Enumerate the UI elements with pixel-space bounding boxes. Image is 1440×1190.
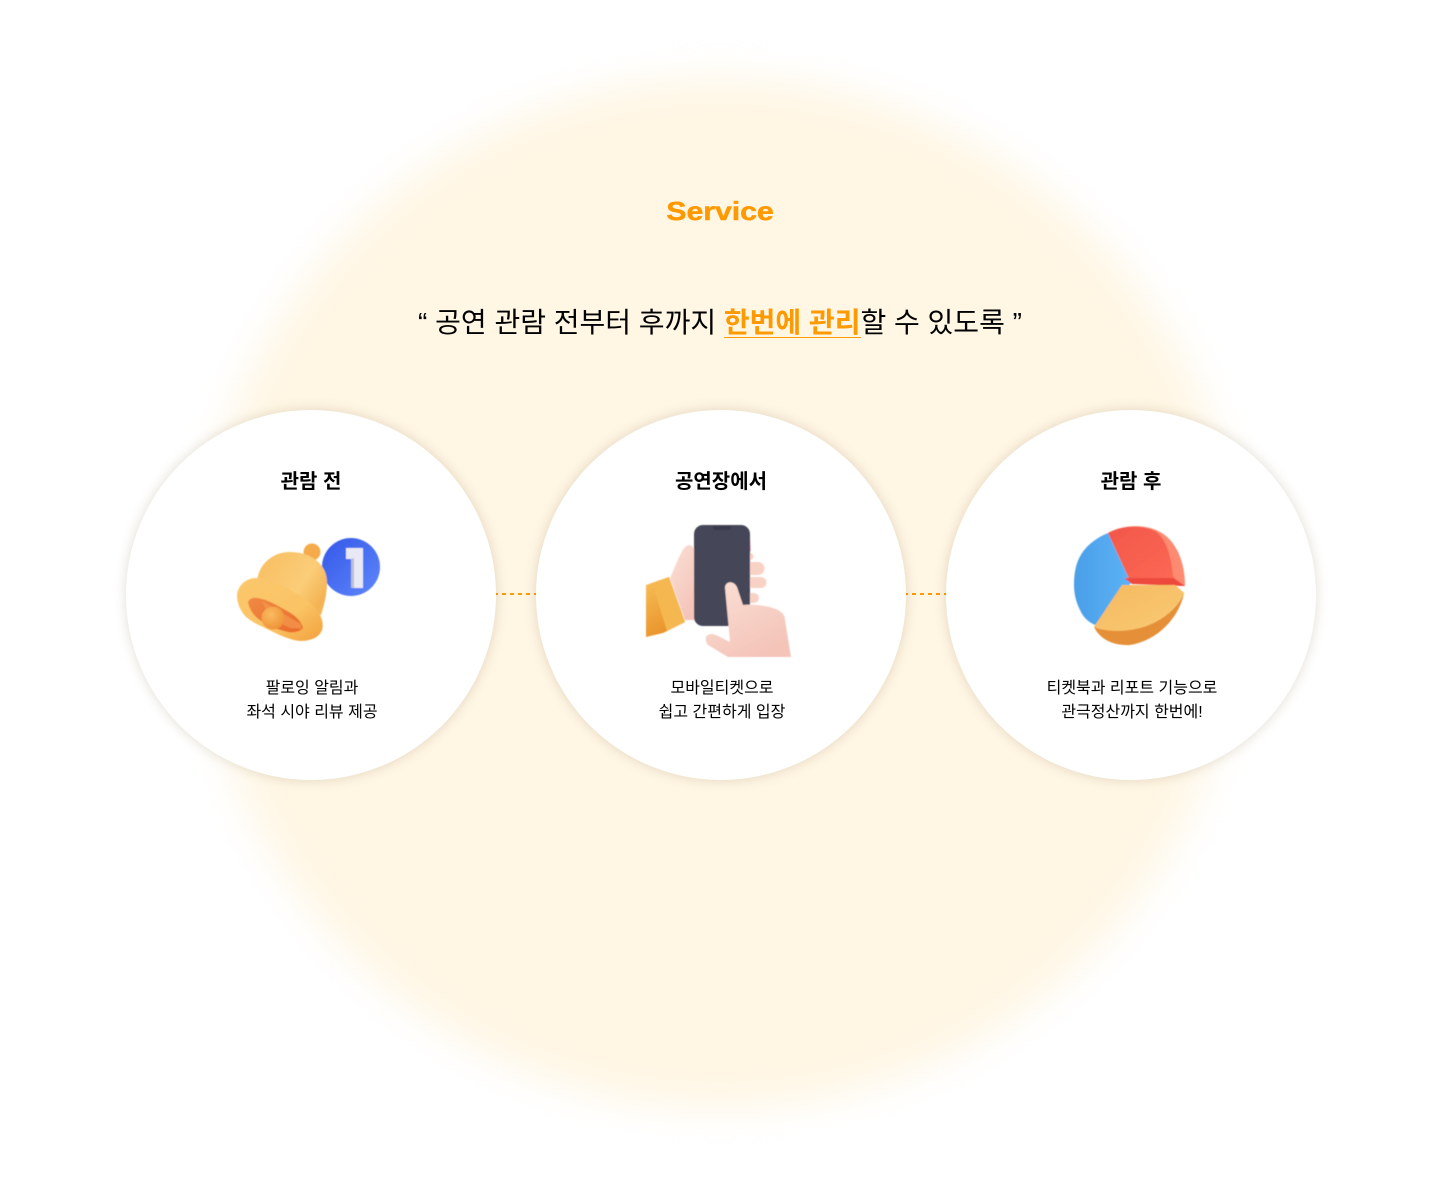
- panel: at the venue: [536, 410, 906, 780]
- section label: Service: Service: [666, 196, 774, 226]
- description: 관극정산까지 한번에!: [1061, 704, 1203, 721]
- description: [1047, 680, 1217, 721]
- connector: venue to after: [906, 593, 946, 595]
- description: 티켓북과 리포트 기능으로: [1047, 680, 1217, 697]
- icon: bell with badge: [236, 537, 381, 642]
- headline quote: “ 공연 관람 전부터 후까지 한번에 관리할 수 있도록 ”: [418, 307, 1022, 338]
- heading: before viewing: 관람 전: [281, 471, 341, 493]
- headline underline: [724, 337, 861, 338]
- connector: before to venue: [496, 593, 536, 595]
- panel: after viewing: [946, 410, 1316, 780]
- heading: after viewing: 관람 후: [1101, 471, 1161, 493]
- description: [659, 680, 785, 721]
- description: 팔로잉 알림과: [266, 680, 358, 697]
- description: 좌석 시야 리뷰 제공: [246, 704, 378, 721]
- description: [246, 680, 378, 721]
- description: 쉽고 간편하게 입장: [659, 704, 785, 721]
- heading: at the venue: 공연장에서: [675, 471, 767, 493]
- icon: hand holding phone: [645, 524, 792, 658]
- panel: before viewing: [126, 410, 496, 780]
- description: 모바일티켓으로: [670, 680, 774, 697]
- icon: 3D pie chart: [1073, 525, 1186, 646]
- background glow: [202, 78, 1238, 1108]
